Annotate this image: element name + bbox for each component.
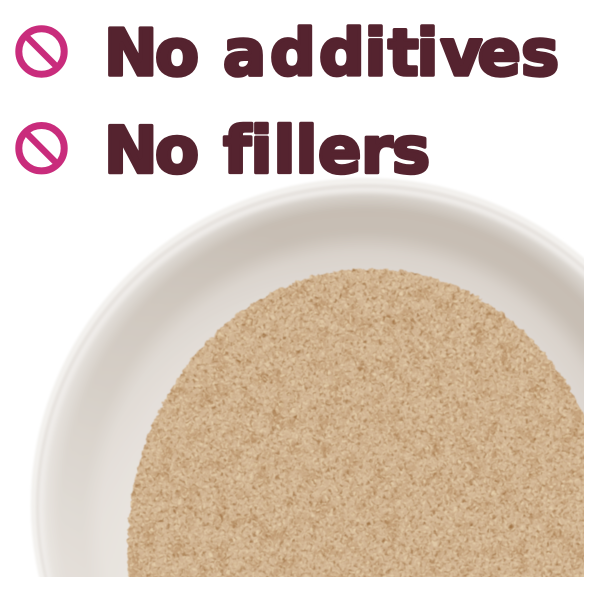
bowl rim (31, 178, 590, 585)
icon: prohibition sign, no additives (19, 29, 64, 74)
heading: No additives: No additives (0, 17, 559, 91)
powder (120, 260, 590, 590)
bowl inner wall (44, 193, 590, 585)
icon: prohibition sign, no fillers (19, 126, 64, 171)
photo: bowl of ground powder (31, 178, 590, 590)
heading: No fillers: No fillers (0, 115, 430, 189)
